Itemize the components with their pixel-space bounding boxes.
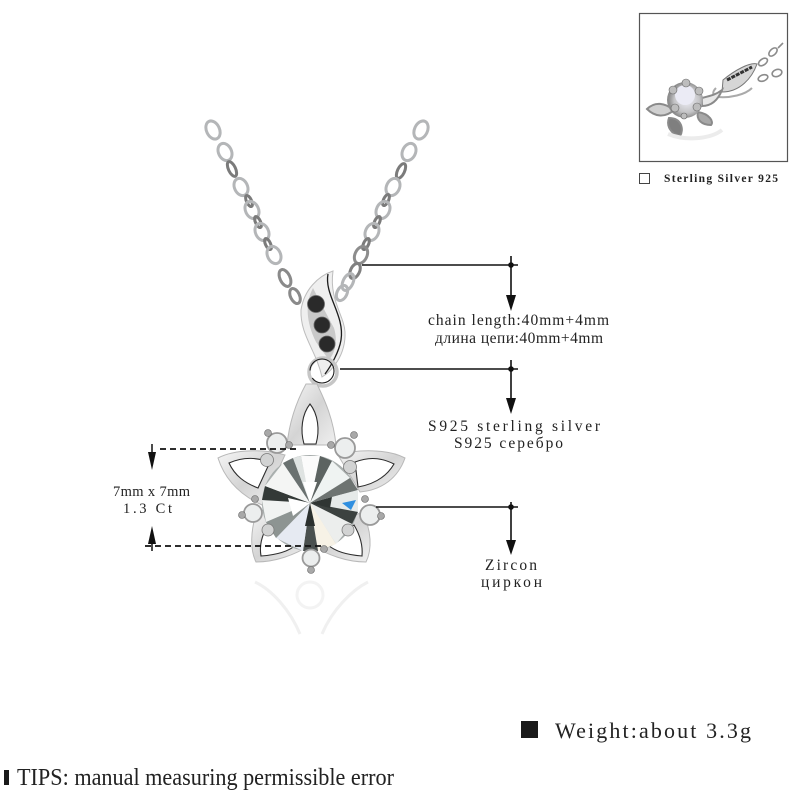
petals <box>218 384 405 562</box>
panel: detail thumbnail <box>640 14 788 162</box>
black stones <box>308 296 335 352</box>
dimension: stone size: 1.3 Ct <box>123 501 172 517</box>
weight note: Weight:about 3.3g <box>555 718 751 743</box>
callout: zircon: циркон <box>481 574 542 591</box>
callout: zircon: Zircon <box>485 557 537 574</box>
thumbnail bail <box>722 64 757 92</box>
small zircons <box>244 433 380 566</box>
pendant bail with black stones <box>301 271 345 377</box>
callout: chain length: chain length:40mm+4mm <box>428 312 609 329</box>
prongs <box>260 454 356 536</box>
reflection <box>255 582 368 634</box>
thumbnail pendant <box>647 90 722 136</box>
callout: zircon <box>376 502 542 591</box>
pendant ring <box>309 358 337 386</box>
callout: sterling silver: S925 серебро <box>454 435 563 452</box>
callout: chain length <box>362 256 609 347</box>
dimension: stone size <box>113 444 325 551</box>
tips note: TIPS: manual measuring permissible error <box>17 765 394 791</box>
thumbnail caption: Sterling Silver 925 <box>664 173 778 185</box>
thumbnail chain <box>757 43 783 83</box>
star pendant <box>218 384 405 634</box>
callout: sterling silver: S925 sterling silver <box>428 418 601 435</box>
callout: sterling silver <box>340 360 601 452</box>
center zircon <box>262 455 358 551</box>
necklace chain <box>203 119 431 305</box>
dimension: stone size: 7mm x 7mm <box>113 484 191 500</box>
petal openings <box>229 404 394 556</box>
callout: chain length: длина цепи:40mm+4mm <box>435 330 603 347</box>
